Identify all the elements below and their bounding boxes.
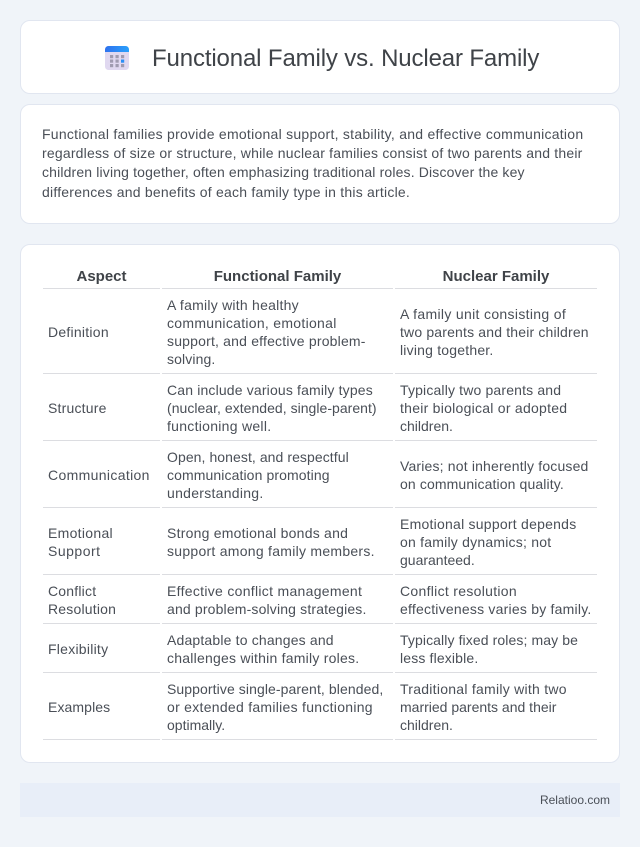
- comparison table: Adaptable to changes and: [167, 632, 334, 648]
- intro text: children living together, often emphasizing traditional roles. Discover the key: [42, 164, 525, 180]
- comparison table: Conflict: [48, 583, 96, 599]
- comparison table: optimally.: [167, 717, 225, 733]
- comparison table: Resolution: [48, 601, 116, 617]
- intro text: Functional families provide emotional support, stability, and effective communication: [42, 126, 583, 142]
- comparison table: Support: [48, 543, 101, 559]
- comparison table: Conflict resolution: [400, 583, 517, 599]
- comparison table: children.: [400, 418, 453, 434]
- comparison table: on family dynamics; not: [400, 534, 551, 550]
- comparison table: support among family members.: [167, 543, 375, 559]
- comparison table: Effective conflict management: [167, 583, 362, 599]
- comparison table: guaranteed.: [400, 552, 475, 568]
- comparison table: Functional Family: [214, 268, 341, 285]
- comparison table: Emotional: [48, 525, 113, 541]
- comparison table: (nuclear, extended, single-parent): [167, 400, 377, 416]
- comparison table: A family with healthy: [167, 297, 299, 313]
- icon: calendar: [105, 46, 129, 70]
- panel: table card: [20, 244, 620, 763]
- comparison table: Typically fixed roles; may be: [400, 632, 578, 648]
- comparison table: Open, honest, and respectful: [167, 449, 349, 465]
- comparison table: living together.: [400, 342, 493, 358]
- intro text: differences and benefits of each family type in this article.: [42, 184, 410, 200]
- comparison table: their biological or adopted: [400, 400, 567, 416]
- comparison table: Emotional support depends: [400, 516, 576, 532]
- panel: intro card: [20, 104, 620, 224]
- comparison table: Examples: [48, 699, 110, 715]
- comparison table: Strong emotional bonds and: [167, 525, 348, 541]
- comparison table: support, and effective problem-: [167, 333, 366, 349]
- comparison table: less flexible.: [400, 650, 478, 666]
- footer bar: Relatioo.com: [540, 793, 610, 807]
- comparison table: A family unit consisting of: [400, 306, 566, 322]
- comparison table: and problem-solving strategies.: [167, 601, 367, 617]
- comparison table: Communication: [48, 467, 150, 483]
- footer bar: [20, 783, 620, 817]
- comparison table: Definition: [48, 324, 109, 340]
- comparison table: Flexibility: [48, 641, 108, 657]
- comparison table: two parents and their children: [400, 324, 589, 340]
- comparison table: Traditional family with two: [400, 681, 567, 697]
- comparison table: on communication quality.: [400, 476, 564, 492]
- comparison table: communication promoting: [167, 467, 330, 483]
- comparison table: effectiveness varies by family.: [400, 601, 592, 617]
- comparison table: communication, emotional: [167, 315, 337, 331]
- comparison table: Nuclear Family: [443, 268, 549, 285]
- comparison table: understanding.: [167, 485, 264, 501]
- comparison table: Structure: [48, 400, 107, 416]
- comparison table: or extended families functioning: [167, 699, 373, 715]
- comparison table: Typically two parents and: [400, 382, 561, 398]
- comparison table: [43, 268, 597, 740]
- intro text: regardless of size or structure, while nuclear families consist of two parents and their: [42, 145, 583, 161]
- comparison table: children.: [400, 717, 453, 733]
- comparison table: solving.: [167, 351, 215, 367]
- title: Functional Family vs. Nuclear Family: [152, 45, 539, 72]
- comparison table: challenges within family roles.: [167, 650, 359, 666]
- panel: header card: [20, 20, 620, 94]
- comparison table: functioning well.: [167, 418, 271, 434]
- comparison table: Aspect: [76, 268, 127, 285]
- comparison table: married parents and their: [400, 699, 556, 715]
- comparison table: Varies; not inherently focused: [400, 458, 589, 474]
- comparison table: Supportive single-parent, blended,: [167, 681, 383, 697]
- comparison table: Can include various family types: [167, 382, 373, 398]
- intro text: [42, 126, 583, 200]
